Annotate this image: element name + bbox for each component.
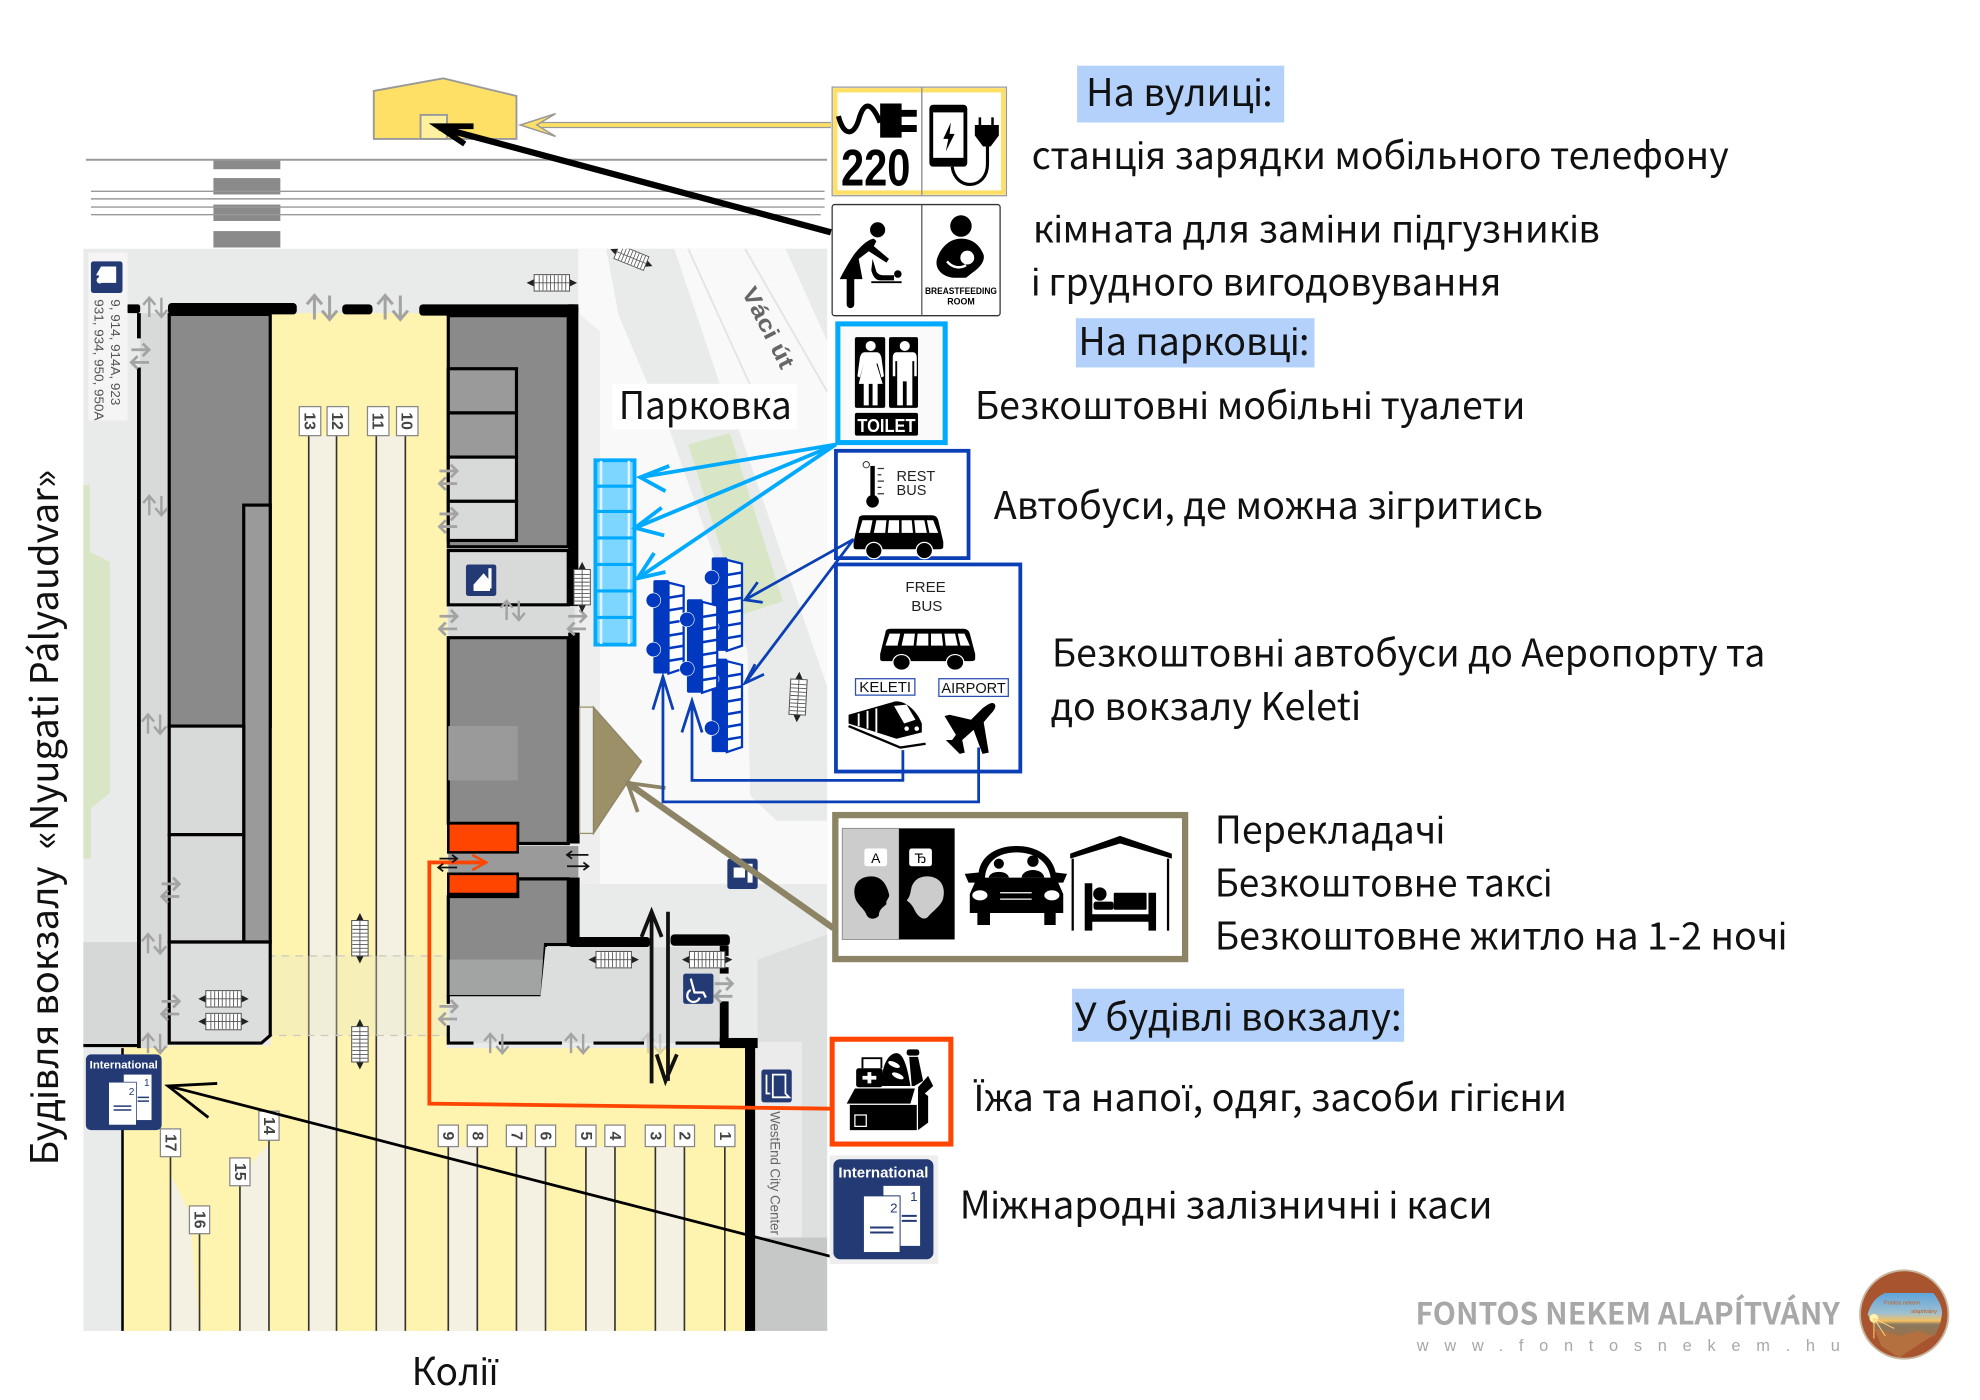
platform number labels: 12 (328, 412, 345, 430)
platform number labels: 1 (716, 1131, 733, 1140)
left building block (83, 313, 270, 1331)
logo emblem: Fontos nekem (1884, 1300, 1920, 1306)
station outbuilding: top track area (86, 160, 827, 247)
track stripes and lines (170, 436, 725, 1331)
platform number labels: 5 (577, 1131, 594, 1140)
text: baby room (1032, 198, 1600, 306)
map street labels: Váci út (737, 282, 800, 373)
text: baby room: і грудного вигодовування (1032, 251, 1501, 306)
gray passage arrows (131, 295, 732, 1053)
corridor black arrows (438, 851, 588, 871)
panel: free bus: FREE (905, 579, 946, 596)
platform number labels: 11 (369, 413, 386, 430)
bus stop info panel: 9, 914, 914A, 923 (108, 299, 123, 405)
panel: baby care (832, 205, 1000, 316)
platform number labels: 3 (646, 1131, 663, 1140)
panel: toilets: TOILET (857, 415, 915, 436)
label: tracks: Колії (412, 1341, 499, 1396)
section heading: street: На вулиці: (1086, 62, 1273, 117)
platform number labels (160, 407, 735, 1234)
logo text: FONTOS NEKEM ALAPÍTVÁNY (1416, 1290, 1840, 1334)
panel: rest bus: BUS (897, 483, 927, 499)
panel: baby care: ROOM (947, 296, 975, 306)
lower grey hall (448, 947, 745, 1043)
dashed overlay band (240, 956, 543, 1035)
arrow: charging (520, 114, 831, 136)
platform number labels: 15 (231, 1163, 248, 1181)
panel: translators, taxi, housing (835, 815, 1185, 959)
panel: food and hygiene (832, 1039, 951, 1144)
platform number labels: 8 (468, 1131, 485, 1140)
tan arrow (628, 783, 833, 928)
panel: translators, taxi, housing: А (871, 850, 881, 866)
red arrow (429, 855, 831, 1109)
platform number labels: 14 (260, 1117, 277, 1135)
bus stop info panel (88, 253, 128, 421)
yellow building (374, 78, 516, 139)
text: free bus: до вокзалу Keleti (1051, 676, 1361, 731)
section heading: station: У будівлі вокзалу: (1075, 986, 1402, 1041)
map street labels: WestEnd City Center (767, 1111, 783, 1235)
section heading: parking: На парковці: (1078, 311, 1309, 366)
yellow station hall (122, 313, 745, 1331)
text: charging: станція зарядки мобільного телефону (1032, 125, 1729, 180)
parked buses (646, 557, 742, 752)
platform number labels: 13 (300, 412, 317, 430)
panel: rest bus: REST (897, 469, 935, 485)
label: station building: Будівля вокзалу «Nyugati Pályaudvar» (14, 470, 69, 1166)
arrow: ticket office (168, 1083, 831, 1256)
panel: international tickets (830, 1155, 938, 1264)
panel: charging: 220 (841, 139, 910, 197)
arrow: baby room (438, 126, 831, 232)
platform number labels: 7 (507, 1131, 524, 1140)
thick outer walls (126, 303, 758, 1331)
label: parking: Парковка (619, 375, 792, 430)
long double arrows (641, 912, 677, 1083)
platform number labels: 2 (675, 1131, 692, 1140)
platform number labels: 9 (439, 1131, 456, 1140)
platform number labels: 6 (536, 1131, 553, 1140)
bus stop info panel: 931, 934, 950, 950A (92, 299, 107, 421)
stairs symbols (198, 242, 808, 1070)
panel: free bus (836, 564, 1020, 772)
logo text: www.fontosnekem.hu (1416, 1337, 1840, 1355)
international icon on map (86, 1054, 162, 1130)
text: services: Перекладачі (1215, 800, 1445, 855)
panel: free bus: KELETI (859, 679, 911, 696)
text: baby room: кімната для заміни підгузників (1033, 198, 1600, 253)
platform number labels: 17 (161, 1134, 178, 1152)
panel: charging (832, 87, 1006, 197)
platform number labels: 10 (398, 412, 415, 430)
arrows: toilets to parking (635, 444, 836, 578)
text: services: Безкоштовне таксі (1215, 853, 1552, 908)
panel: free bus: AIRPORT (941, 680, 1006, 697)
text: services: Безкоштовне житло на 1-2 ночі (1215, 906, 1787, 961)
text: food: Їжа та напої, одяг, засоби гігієни (974, 1067, 1567, 1122)
map base (83, 249, 827, 1331)
panel: baby care: BREASTFEEDING (925, 286, 997, 296)
logo text (1416, 1290, 1840, 1355)
parking area: toilets (595, 460, 635, 645)
text: free bus (1051, 623, 1765, 731)
arrows: buses (653, 539, 979, 802)
text: free bus: Безкоштовні автобуси до Аеропорту та (1052, 623, 1765, 678)
text: toilets: Безкоштовні мобільні туалети (975, 375, 1525, 430)
panel: free bus: BUS (911, 598, 942, 615)
platform number labels: 16 (190, 1211, 207, 1229)
small map icons (466, 564, 792, 1102)
map street labels (737, 282, 800, 1235)
logo emblem: alapítvány (1911, 1309, 1937, 1315)
panel: toilets (838, 324, 945, 443)
building triangle (tan) (580, 707, 641, 833)
text: tickets: Міжнародні залізничні і каси (960, 1175, 1493, 1230)
panel: translators, taxi, housing: Ђ (915, 850, 927, 866)
red rooms (448, 823, 518, 894)
panel: rest bus (836, 451, 969, 559)
right building block (448, 316, 578, 995)
logo emblem (1860, 1270, 1948, 1359)
text: rest bus: Автобуси, де можна зігритись (994, 475, 1543, 530)
platform number labels: 4 (606, 1131, 623, 1140)
text: services (1215, 800, 1787, 961)
